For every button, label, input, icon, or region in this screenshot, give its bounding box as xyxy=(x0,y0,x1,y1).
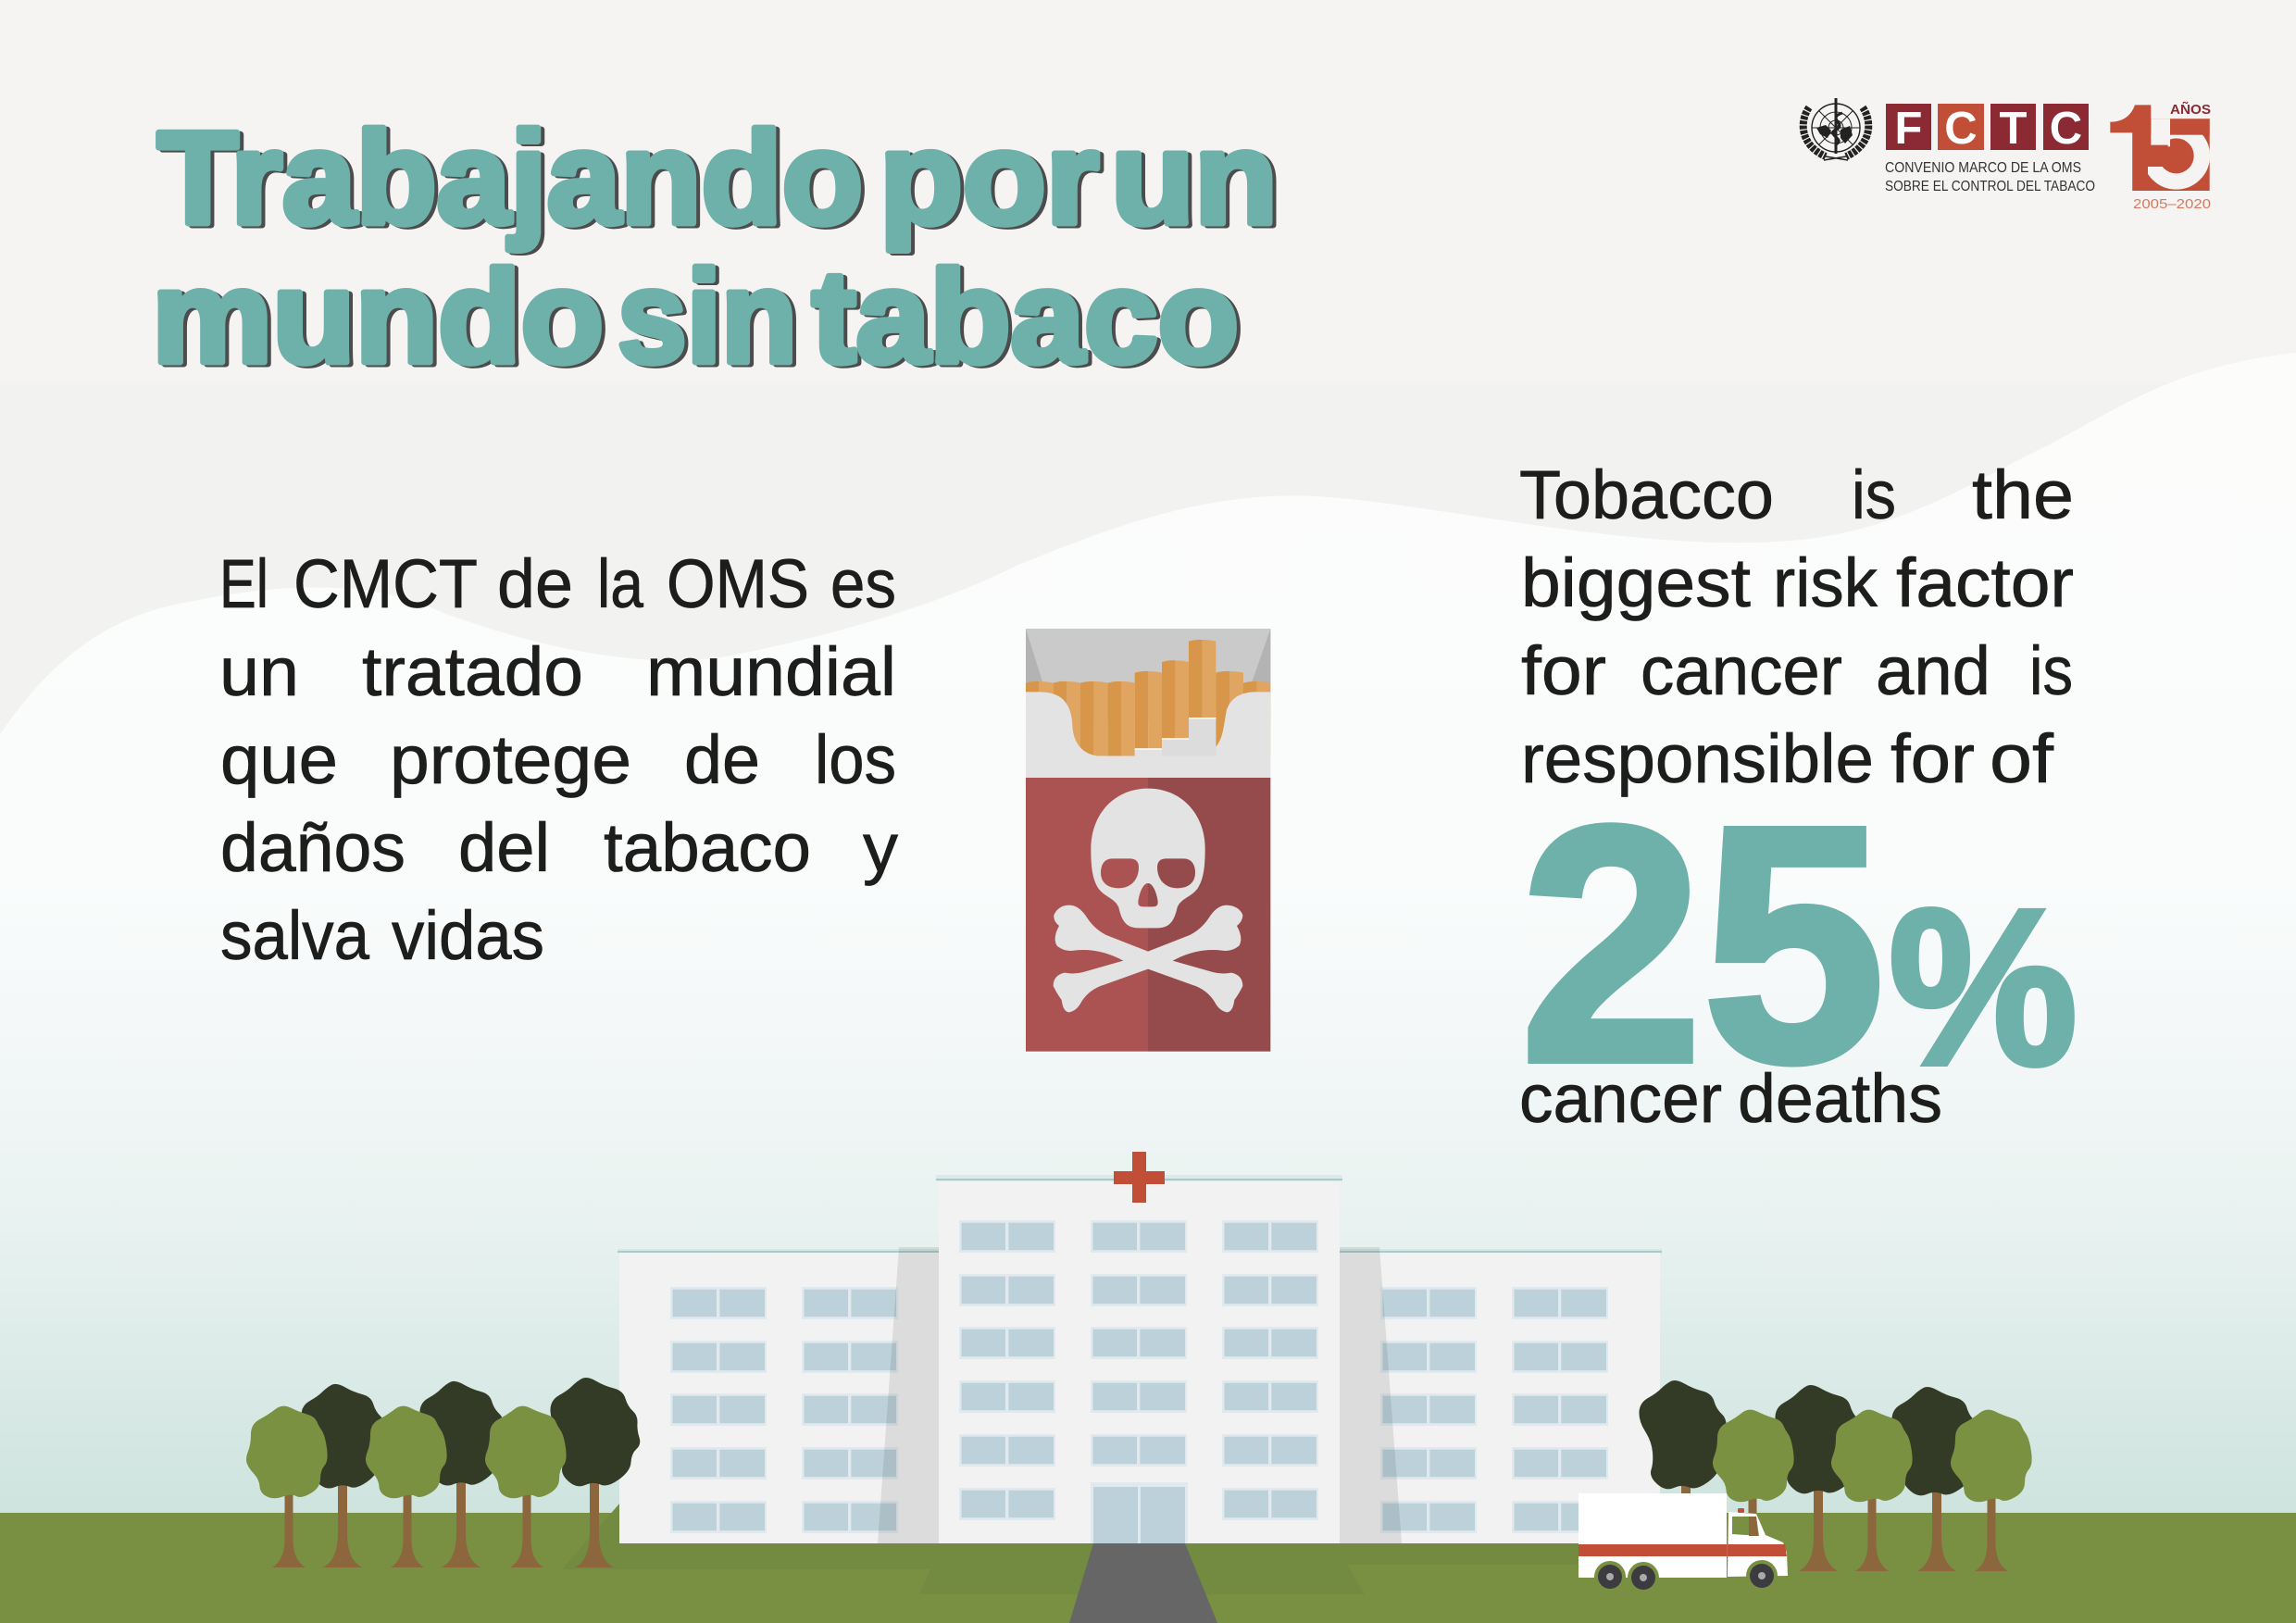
logo: FCTC caption: SOBRE EL CONTROL DEL TABACO xyxy=(1885,179,2095,194)
right wing xyxy=(1340,1247,1662,1543)
ambulance xyxy=(1574,1493,1796,1597)
text block: left paragraph: protege xyxy=(390,721,631,798)
text block: left paragraph: la xyxy=(597,545,644,622)
background: top band xyxy=(0,0,2296,382)
text block: cancer deaths: deaths xyxy=(1738,1060,1942,1137)
logo: 15 years mark: AÑOS xyxy=(2170,101,2211,118)
tree: light 2 xyxy=(1831,1410,1913,1571)
text block: left paragraph: daños xyxy=(220,809,406,886)
statistic: 25% xyxy=(1520,756,2078,1131)
text block: left paragraph: tabaco xyxy=(604,809,811,886)
title: tabaco xyxy=(812,243,1239,391)
logo: FCTC blocks xyxy=(1886,104,2089,154)
text block: left paragraph: del xyxy=(458,809,550,886)
text block: left paragraph: que xyxy=(220,721,338,798)
logo: FCTC caption xyxy=(1885,160,2095,194)
tree: dark 3 xyxy=(1891,1387,1981,1571)
ground xyxy=(0,1513,2296,1623)
text block: left paragraph xyxy=(219,545,898,974)
text block: right paragraph: is xyxy=(1852,456,1896,533)
text block: left paragraph: y xyxy=(863,809,898,886)
icon: cigarette pack with skull xyxy=(1026,629,1270,1052)
text block: left paragraph: los xyxy=(815,721,896,798)
hospital building xyxy=(618,1152,1662,1543)
text block: left paragraph: vidas xyxy=(392,897,544,974)
text block: left paragraph: CMCT xyxy=(293,545,478,622)
text block: left paragraph: es xyxy=(830,545,896,622)
text block: left paragraph: El xyxy=(219,545,268,622)
text block: right paragraph xyxy=(1519,456,2074,797)
cigarettes xyxy=(1026,640,1270,756)
entrance door xyxy=(1091,1482,1188,1543)
tree: dark 3 xyxy=(550,1378,640,1567)
logo: FCTC blocks: T xyxy=(2000,104,2028,154)
text block: right paragraph: and xyxy=(1876,632,1990,709)
logo: FCTC blocks: F xyxy=(1895,104,1922,154)
tree: light 1 xyxy=(1713,1410,1794,1571)
title: por xyxy=(880,105,1099,252)
title: mundo xyxy=(152,243,604,391)
text block: left paragraph: de xyxy=(684,721,760,798)
skull xyxy=(1091,789,1205,928)
hospital shadow on ground xyxy=(562,1503,1741,1594)
background: sky wave xyxy=(0,353,2296,1518)
tree: dark 2 xyxy=(419,1381,505,1567)
text block: right paragraph: biggest xyxy=(1521,544,1751,621)
road xyxy=(1069,1543,1217,1623)
title: un xyxy=(1111,105,1278,252)
tree: light 1 xyxy=(246,1406,328,1567)
text block: cancer deaths xyxy=(1519,1060,1942,1137)
logo: 15 years mark xyxy=(2110,101,2211,212)
text block: left paragraph: de xyxy=(497,545,573,622)
red cross xyxy=(1114,1152,1165,1203)
text block: left paragraph: OMS xyxy=(667,545,809,622)
title xyxy=(152,105,1278,391)
tree: dark 2 xyxy=(1775,1385,1865,1571)
text block: right paragraph: factor xyxy=(1896,544,2074,621)
pack flap xyxy=(1026,692,1270,780)
statistic: 25%: % xyxy=(1889,863,2078,1111)
text block: right paragraph: Tobacco xyxy=(1519,456,1774,533)
text block: cancer deaths: cancer xyxy=(1519,1060,1722,1137)
text block: right paragraph: cancer xyxy=(1641,632,1842,709)
logo: WHO emblem xyxy=(1803,98,1868,160)
text block: right paragraph: for xyxy=(1890,720,1975,797)
left wing xyxy=(618,1247,939,1543)
logo: FCTC blocks: C xyxy=(2050,104,2082,154)
crossbones xyxy=(1054,905,1242,1012)
logo: FCTC caption: CONVENIO MARCO DE LA OMS xyxy=(1885,160,2081,176)
text block: left paragraph: tratado xyxy=(362,633,583,710)
text block: right paragraph: is xyxy=(2029,632,2073,709)
text block: left paragraph: mundial xyxy=(646,633,896,710)
text block: right paragraph: responsible xyxy=(1521,720,1874,797)
trees: left group xyxy=(246,1378,640,1567)
text block: right paragraph: the xyxy=(1972,456,2074,533)
tree: dark 1 xyxy=(1639,1380,1728,1571)
text block: left paragraph: salva xyxy=(220,897,370,974)
statistic: 25%: 25 xyxy=(1520,756,1885,1131)
title: Trabajando xyxy=(157,105,863,252)
tree: dark 1 xyxy=(301,1384,387,1567)
background: lower band xyxy=(0,382,2296,753)
logo: FCTC blocks: C xyxy=(1944,104,1978,154)
text block: right paragraph: risk xyxy=(1773,544,1878,621)
logo: 15 years mark: 2005–2020 xyxy=(2133,196,2211,212)
pack label xyxy=(1026,778,1148,1052)
trees: right group xyxy=(1639,1380,2032,1571)
title: sin xyxy=(618,243,797,391)
tree: light 3 xyxy=(485,1406,567,1567)
tree: light 2 xyxy=(366,1406,447,1567)
centre block xyxy=(936,1175,1342,1543)
tree: light 3 xyxy=(1951,1410,2032,1571)
text block: right paragraph: of xyxy=(1990,720,2053,797)
text block: left paragraph: un xyxy=(219,633,299,710)
text block: right paragraph: for xyxy=(1521,632,1606,709)
